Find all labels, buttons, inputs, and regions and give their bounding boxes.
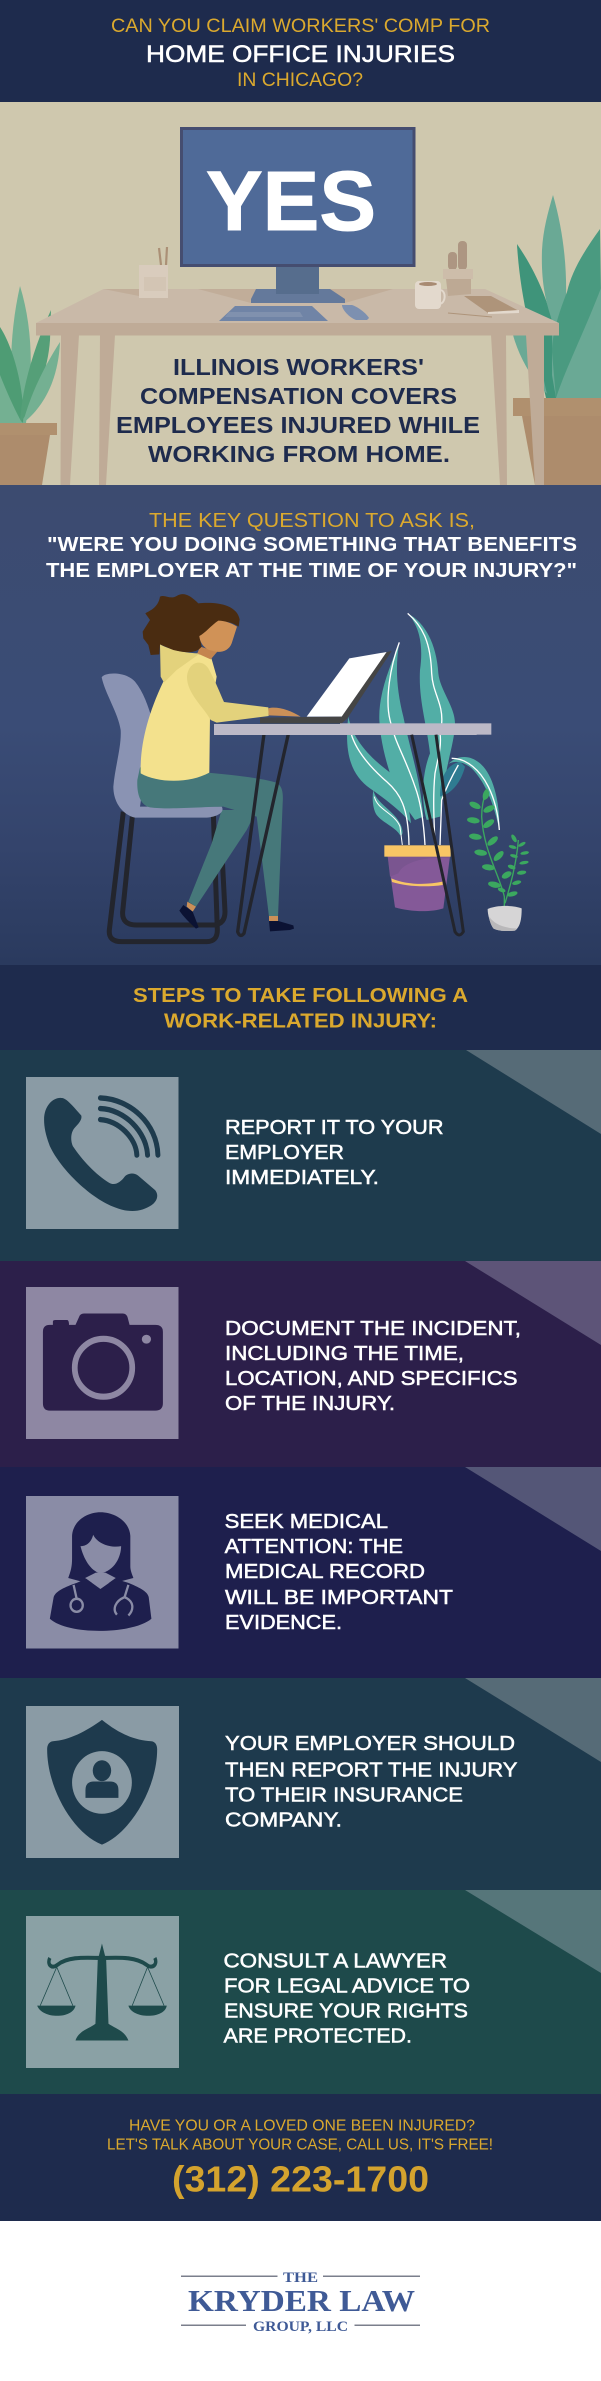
panel: key question xyxy=(0,485,601,965)
statement text: ILLINOIS WORKERS' xyxy=(173,354,424,380)
icon: small green plant xyxy=(467,788,529,931)
hand xyxy=(268,708,301,717)
step 5 text xyxy=(224,1950,470,2047)
illustration: potted plant behind desk xyxy=(347,613,529,931)
call to action text: LET'S TALK ABOUT YOUR CASE, CALL US, IT'S FREE! xyxy=(107,2136,493,2153)
table top xyxy=(214,724,477,735)
logo: The Kryder Law Group, LLC: KRYDER LAW xyxy=(188,2283,415,2318)
panel: call to action xyxy=(0,2094,601,2221)
statement text xyxy=(116,354,480,467)
title line 3: IN CHICAGO? xyxy=(237,69,363,91)
desk leg: right xyxy=(340,723,491,935)
step 5 text: ENSURE YOUR RIGHTS xyxy=(224,2000,468,2022)
step 1 text xyxy=(225,1117,444,1189)
step 4 text xyxy=(225,1733,518,1832)
step 3 text: EVIDENCE. xyxy=(225,1612,342,1634)
step 3 text: MEDICAL RECORD xyxy=(225,1561,425,1583)
statement text: EMPLOYEES INJURED WHILE xyxy=(116,412,480,438)
step 2 text xyxy=(225,1318,521,1415)
panel: title header xyxy=(0,0,601,102)
key question text xyxy=(46,509,577,582)
desk xyxy=(36,289,559,485)
panel: steps heading xyxy=(0,965,601,1050)
key question text: THE EMPLOYER AT THE TIME OF YOUR INJURY?" xyxy=(46,560,577,582)
panel: desk scene with YES monitor xyxy=(0,102,601,485)
YES heading: YES xyxy=(206,154,376,248)
key question text: THE KEY QUESTION TO ASK IS, xyxy=(149,509,475,532)
icon: doctor xyxy=(50,1512,151,1631)
icon: right plant xyxy=(513,195,601,398)
back leg xyxy=(188,810,257,907)
step 3 text: ATTENTION: THE xyxy=(225,1536,403,1558)
step 3 text xyxy=(225,1511,453,1634)
desk legs xyxy=(238,734,288,935)
step 5 text: CONSULT A LAWYER xyxy=(224,1950,447,1972)
call to action text xyxy=(107,2117,493,2153)
icon: scales of justice xyxy=(37,1943,167,2041)
step 1 text: REPORT IT TO YOUR xyxy=(225,1117,444,1139)
panel: step 5 lawyer xyxy=(0,1890,601,2094)
panel: steps heading: WORK-RELATED INJURY: xyxy=(164,1010,437,1032)
icon: right plant pot xyxy=(513,398,601,485)
step 5 text: FOR LEGAL ADVICE TO xyxy=(224,1975,470,1997)
icon: camera xyxy=(43,1313,163,1411)
icon: left plant pot xyxy=(0,423,57,485)
panel: steps heading: STEPS TO TAKE FOLLOWING A xyxy=(133,984,468,1007)
hoodie xyxy=(141,653,217,781)
call to action text: HAVE YOU OR A LOVED ONE BEEN INJURED? xyxy=(129,2117,475,2134)
hair, neck and face xyxy=(197,647,217,659)
icon: keyboard xyxy=(219,306,328,321)
panel: step 4 insurance xyxy=(0,1678,601,1890)
step 5 text: ARE PROTECTED. xyxy=(224,2025,412,2047)
step 2 text: INCLUDING THE TIME, xyxy=(225,1343,464,1365)
icon: shield with person xyxy=(47,1720,157,1845)
panel: step 3 medical xyxy=(0,1467,601,1678)
step 1 text: EMPLOYER xyxy=(225,1142,344,1164)
icon: pencil cup xyxy=(139,247,168,298)
step 3 text: SEEK MEDICAL xyxy=(225,1511,388,1533)
title line 2: HOME OFFICE INJURIES xyxy=(146,41,455,68)
step 4 text: COMPANY. xyxy=(225,1810,342,1832)
step 3 text: WILL BE IMPORTANT xyxy=(225,1587,453,1609)
panel: step 1 report xyxy=(0,1050,601,1261)
icon: notebook and pencil xyxy=(448,296,519,317)
icon: phone xyxy=(44,1098,158,1211)
icon: left plant xyxy=(0,286,60,423)
title line 1: CAN YOU CLAIM WORKERS' COMP FOR xyxy=(111,15,490,37)
panel: step 2 document xyxy=(0,1261,601,1467)
step 2 text: DOCUMENT THE INCIDENT, xyxy=(225,1318,521,1340)
phone number: (312) 223-1700 xyxy=(172,2158,429,2200)
front leg xyxy=(137,767,283,917)
laptop xyxy=(307,652,387,717)
logo: The Kryder Law Group, LLC: THE xyxy=(283,2270,318,2286)
step 4 text: TO THEIR INSURANCE xyxy=(225,1784,463,1806)
step 2 text: LOCATION, AND SPECIFICS xyxy=(225,1368,518,1390)
step 4 text: YOUR EMPLOYER SHOULD xyxy=(225,1733,515,1755)
logo: The Kryder Law Group, LLC xyxy=(181,2270,420,2335)
icon: coffee mug xyxy=(415,281,445,309)
chair back and seat xyxy=(102,674,223,818)
step 4 text: THEN REPORT THE INJURY xyxy=(225,1760,518,1782)
key question text: "WERE YOU DOING SOMETHING THAT BENEFITS xyxy=(47,534,577,556)
icon: cactus pot xyxy=(443,241,473,296)
icon: monitor xyxy=(182,128,414,303)
statement text: COMPENSATION COVERS xyxy=(140,383,457,409)
step 1 text: IMMEDIATELY. xyxy=(225,1167,379,1189)
icon: mouse xyxy=(342,305,369,320)
step 2 text: OF THE INJURY. xyxy=(225,1393,395,1415)
logo: The Kryder Law Group, LLC: GROUP, LLC xyxy=(253,2319,348,2335)
statement text: WORKING FROM HOME. xyxy=(148,441,450,467)
chair legs xyxy=(109,812,225,942)
illustration: woman working on laptop at desk xyxy=(102,594,477,942)
